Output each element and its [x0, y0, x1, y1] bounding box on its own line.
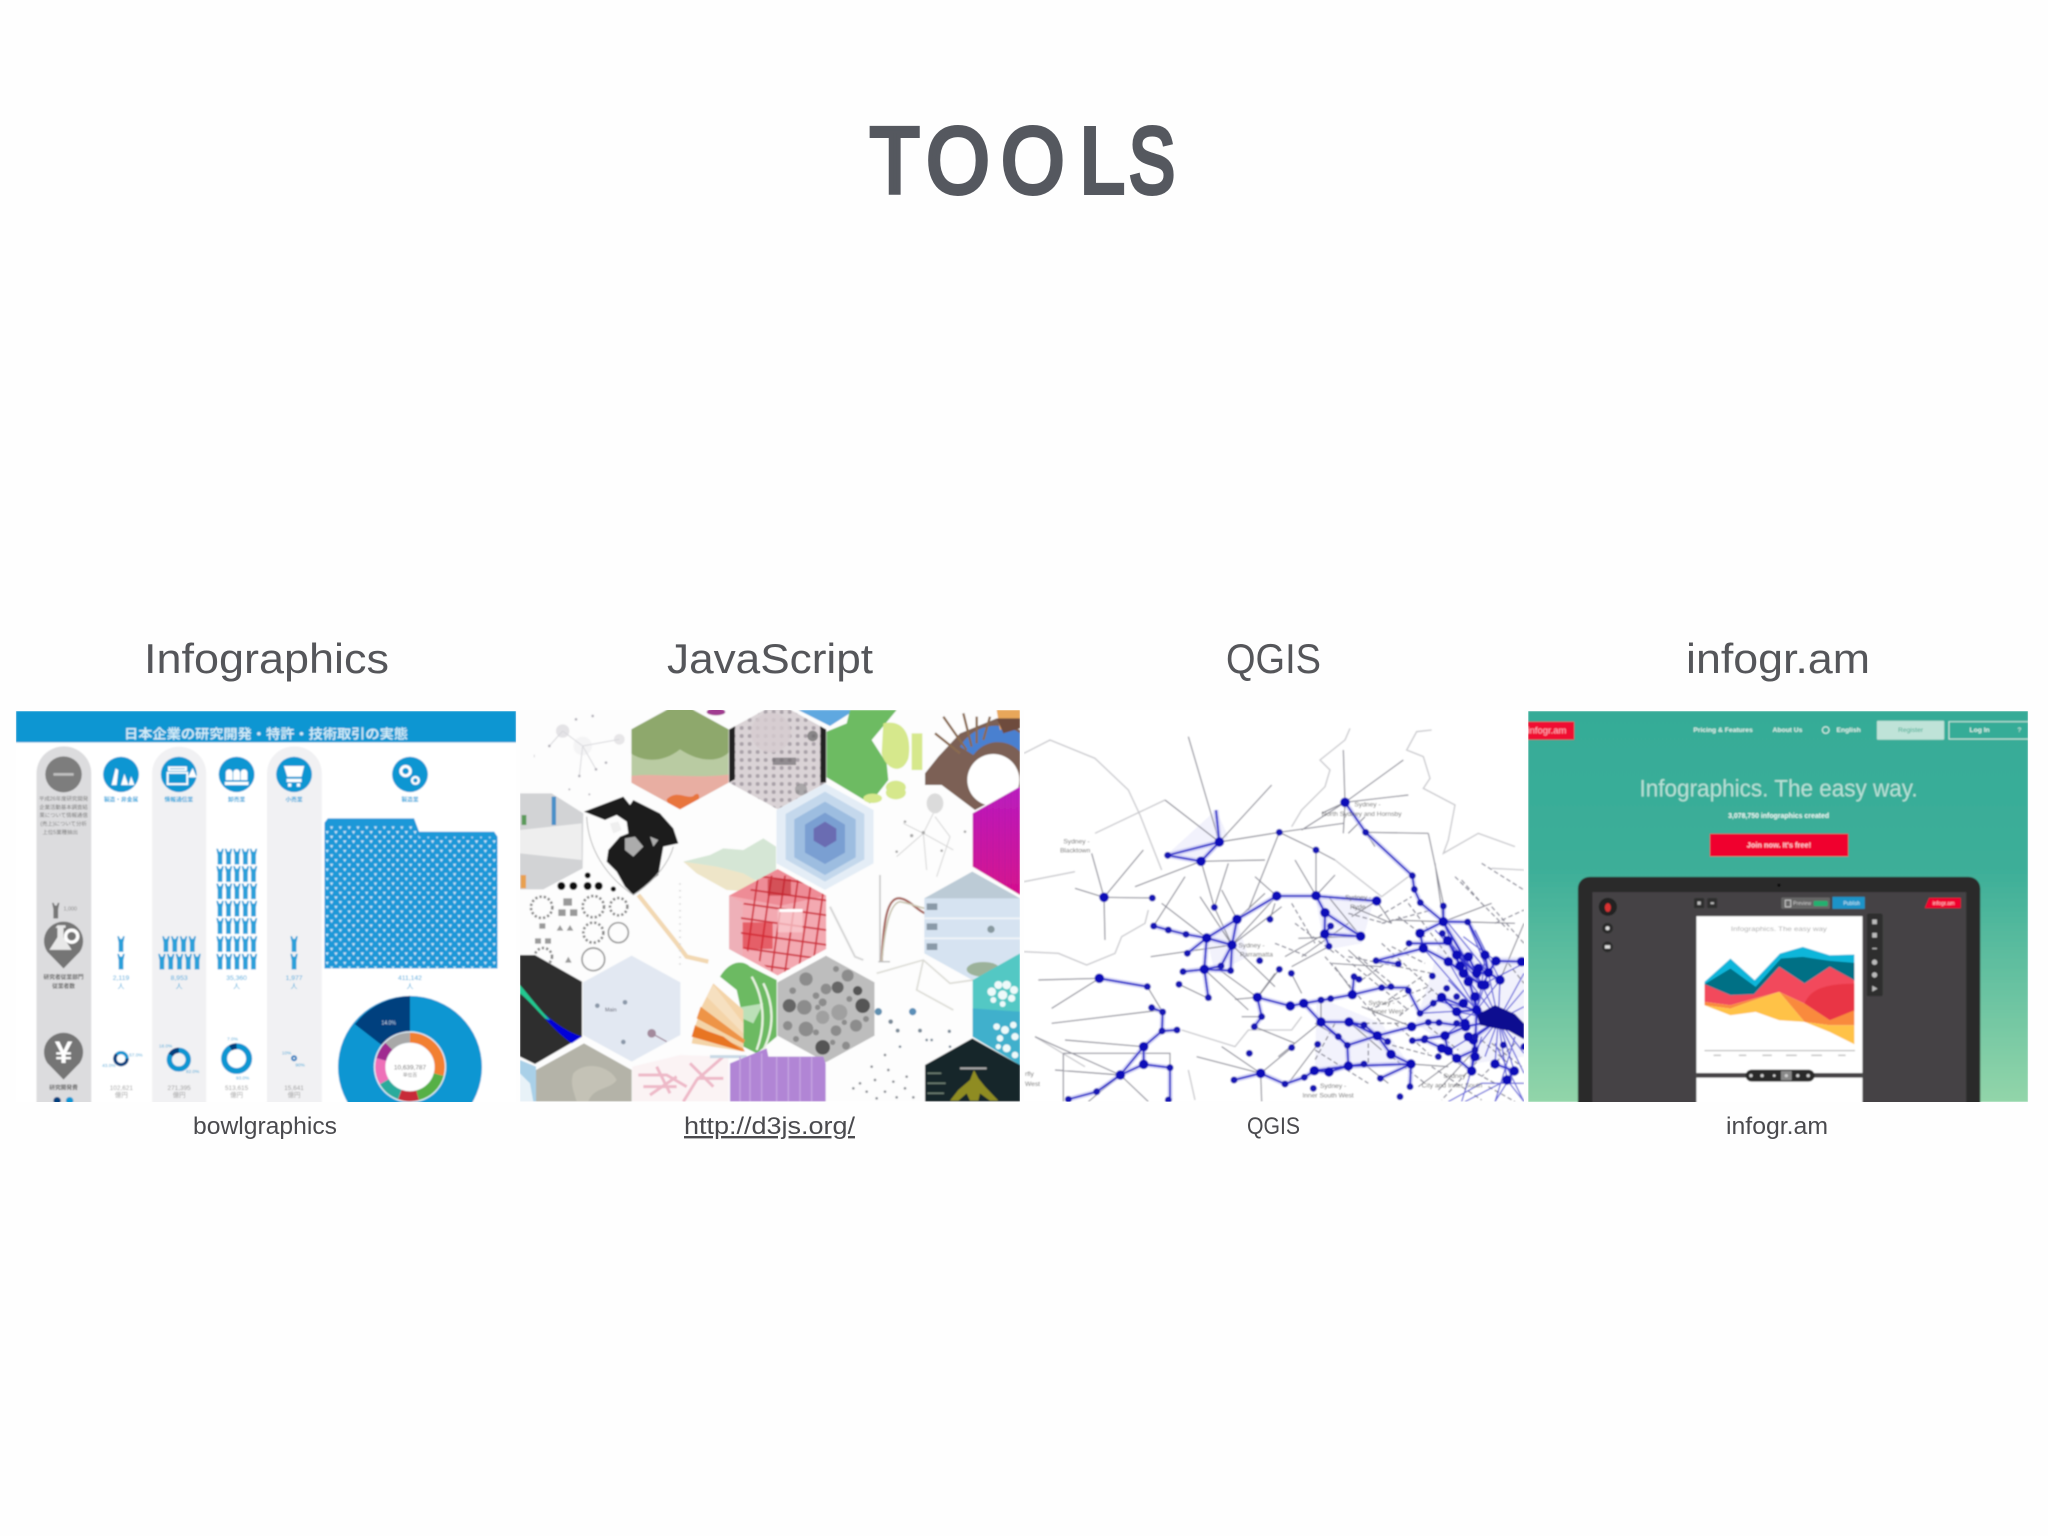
place labels: Sydney - [1063, 838, 1090, 845]
description text: 平成26年度研究開発 [39, 794, 89, 802]
value labels: 411,142 [398, 975, 422, 982]
place labels: Inner South West [1302, 1092, 1354, 1099]
value labels [113, 975, 422, 991]
editor white page [1696, 916, 1862, 1116]
hex: dots network bottom [852, 1054, 915, 1100]
hex: teal dots network [875, 960, 973, 1048]
pin icon: yen [44, 1033, 83, 1104]
donut percentages: 82.0% [186, 1069, 199, 1074]
place labels [1025, 801, 1483, 1099]
donut percentages [102, 1036, 305, 1080]
logo badge: infogr.am [1528, 726, 1566, 736]
donut percentages: 93.0% [236, 1075, 249, 1080]
revenue labels: 億円 [230, 1090, 243, 1099]
hex: light blue panels [924, 872, 1020, 980]
hex: gray dot matrix [729, 703, 826, 809]
register button: Register [1898, 727, 1924, 734]
editor top bar: Publish [1843, 901, 1860, 907]
place labels: Inner West [1372, 1008, 1404, 1015]
navigation: About Us [1773, 727, 1803, 734]
revenue labels: 15,641 [284, 1085, 304, 1092]
large donut chart: 14.0% [382, 1020, 396, 1026]
login button: Log In [1970, 727, 1990, 734]
blue link halo [1068, 802, 1524, 1100]
place labels: City and Inner South [1422, 1082, 1483, 1089]
category labels: 情報通信業 [164, 795, 193, 803]
heading: JavaScript: JavaScript [667, 635, 873, 682]
hex: beige globe [520, 1043, 632, 1102]
description text: (売上)について分析 [40, 819, 87, 827]
description text: 果について情報通信 [39, 811, 88, 819]
place labels: West [1025, 1081, 1040, 1088]
editor side toolbar [1867, 914, 1883, 996]
panel: infogr.am website screenshot [1528, 711, 2030, 1116]
category labels: 製造業 [401, 795, 419, 803]
hex: olive stream chart [630, 710, 730, 810]
hex: red grid cube [729, 869, 826, 979]
description text: 企業活動基本調査結 [39, 803, 88, 811]
value labels: 2,119 [113, 975, 129, 982]
hex: blue hexbin [776, 783, 874, 890]
heading: infogr.am: infogr.am [1686, 635, 1870, 682]
panel: bowlgraphics infographic thumbnail [16, 711, 516, 1138]
donut percentages: 7.0% [227, 1036, 238, 1041]
place labels: Sydney - [1238, 942, 1265, 949]
pin icon: research: 研究者従業部門 [44, 973, 84, 981]
hex: pale diagram [583, 956, 680, 1062]
revenue labels: 513,615 [225, 1085, 249, 1092]
area chart [1705, 947, 1854, 1044]
revenue labels [110, 1085, 304, 1099]
light blue link wash [1168, 810, 1524, 1073]
editor left tools [1599, 898, 1617, 952]
thumbnail header banner: 日本企業の研究開発・特許・技術取引の実態 [124, 725, 409, 741]
hex: dark tree [925, 1038, 1020, 1102]
category icons [45, 756, 428, 792]
sunburst [925, 710, 1020, 810]
laptop [1578, 877, 1980, 1116]
caption: infogr.am: infogr.am [1726, 1113, 1828, 1140]
hero counter: 3,078,750 infographics created [1728, 811, 1830, 820]
place labels: Sydney - [1345, 895, 1371, 902]
navigation [1693, 727, 1861, 734]
category labels [104, 795, 419, 803]
editor top bar: infogr.am [1932, 901, 1955, 907]
chart axis [1705, 1051, 1855, 1055]
heading: QGIS: QGIS [1226, 635, 1321, 682]
caption: QGIS: QGIS [1247, 1113, 1300, 1140]
place labels: rfly [1025, 1071, 1035, 1078]
hex: black wedge [520, 955, 582, 1064]
hex: world map [584, 797, 678, 895]
hex: teal blobs [973, 953, 1020, 1065]
editor top bar: Preview [1793, 901, 1811, 907]
purple top shape [707, 709, 725, 715]
value labels: 人 [407, 984, 414, 991]
join button [1710, 834, 1848, 856]
place labels: Ryde [1350, 904, 1366, 911]
value labels: 1,977 [286, 975, 303, 982]
value labels: 8,953 [171, 975, 188, 982]
editor top bar [1694, 897, 1961, 909]
title: S [1129, 110, 1175, 213]
pin icon: yen: ¥ [55, 1034, 73, 1070]
thumbnail header banner [16, 711, 516, 742]
place labels: Sydney - [1320, 1083, 1346, 1090]
caption: d3js link: http://d3js.org/ [684, 1113, 855, 1140]
hex: pink tree [632, 1055, 747, 1102]
pictogram bars [117, 849, 298, 970]
register button [1877, 721, 1944, 740]
category labels: 卸売業 [228, 795, 246, 803]
hex: orange diagonal [638, 883, 708, 970]
place labels: Sydney - [1443, 1073, 1470, 1080]
revenue labels: 億円 [115, 1090, 128, 1099]
place labels: North Sydney and Hornsby [1322, 811, 1402, 818]
category labels: 小売業 [285, 795, 303, 803]
revenue labels: 億円 [288, 1090, 300, 1099]
small donut charts [115, 1046, 296, 1071]
title: TOOL [870, 109, 1125, 213]
large donut chart: 単位百 [403, 1071, 417, 1078]
category labels: 製造・非金属 [104, 795, 138, 803]
hex: gray network right [895, 793, 966, 877]
description text [39, 794, 89, 836]
large donut chart: 10,639,787 [394, 1065, 427, 1072]
small nodes [1068, 832, 1524, 1100]
login button: ? [2017, 727, 2021, 734]
place labels: Sydney - [1354, 801, 1381, 808]
value labels: 35,360 [226, 975, 247, 982]
large donut chart [337, 994, 483, 1102]
green map [827, 710, 922, 803]
dense gray mesh [1275, 863, 1524, 1102]
dense radial blue lines [1420, 922, 1524, 1102]
hex: streamgraph [684, 838, 776, 881]
blue top wedge [798, 710, 855, 726]
hex: magenta [973, 787, 1020, 895]
description text: 上位5業種抽出 [42, 828, 78, 836]
value labels: 人 [233, 984, 240, 991]
page divider toolbar [1696, 1070, 1862, 1082]
pin icon: research [44, 903, 84, 990]
heading: Infographics: Infographics [144, 635, 389, 682]
navigation: Pricing & Features [1693, 727, 1753, 734]
blue link lines [1068, 802, 1524, 1100]
donut percentages: 18.0% [159, 1044, 172, 1049]
map boundaries [1024, 728, 1524, 1100]
caption: bowlgraphics: bowlgraphics [193, 1113, 337, 1140]
join button: Join now. It's free! [1747, 840, 1811, 849]
hero headline: Infographics. The easy way. [1640, 776, 1918, 803]
logo badge [1528, 722, 1574, 740]
hex: purple bars [730, 1048, 826, 1102]
hex: pale diagram: Main [605, 1008, 617, 1014]
hex: gray flows [520, 793, 583, 889]
large nodes [1099, 802, 1522, 1080]
donut percentages: 90% [295, 1062, 305, 1067]
dense dark cluster [1477, 1005, 1524, 1039]
panel: d3js hexagon collage thumbnail [520, 699, 1020, 1102]
hex: gray circle packing [777, 956, 875, 1062]
pin icon: research: 1,000 [64, 907, 77, 912]
revenue labels: 億円 [173, 1090, 186, 1099]
revenue labels: 271,395 [168, 1085, 191, 1092]
donut percentages: 43.0% [102, 1063, 116, 1068]
hex: curve chart [830, 875, 925, 962]
donut percentages: 57.0% [129, 1052, 143, 1057]
value labels: 人 [176, 984, 183, 991]
place labels: Blacktown [1060, 848, 1091, 855]
large pictogram block [324, 818, 498, 969]
value labels: 人 [118, 984, 125, 991]
gray arrows and spokes [1035, 737, 1524, 1102]
editor white page: Infographics. The easy way [1731, 926, 1828, 933]
navigation: English [1836, 727, 1861, 734]
place labels: Parramatta [1240, 952, 1273, 959]
hex: chord diagram [692, 962, 777, 1053]
hex: circle dot diagram [531, 872, 628, 971]
place labels: Sydney - [1368, 1000, 1395, 1007]
revenue labels: 102,621 [110, 1085, 133, 1092]
pin icon: yen: 研究開発費 [49, 1084, 78, 1092]
login button [1949, 722, 2030, 739]
column backgrounds [37, 746, 322, 1104]
value labels: 人 [291, 984, 298, 991]
panel: QGIS flow network map [1024, 710, 1524, 1102]
pin icon: research: 従業者数 [52, 982, 75, 990]
hex: gray network [531, 715, 625, 795]
donut percentages: 10% [282, 1050, 291, 1055]
